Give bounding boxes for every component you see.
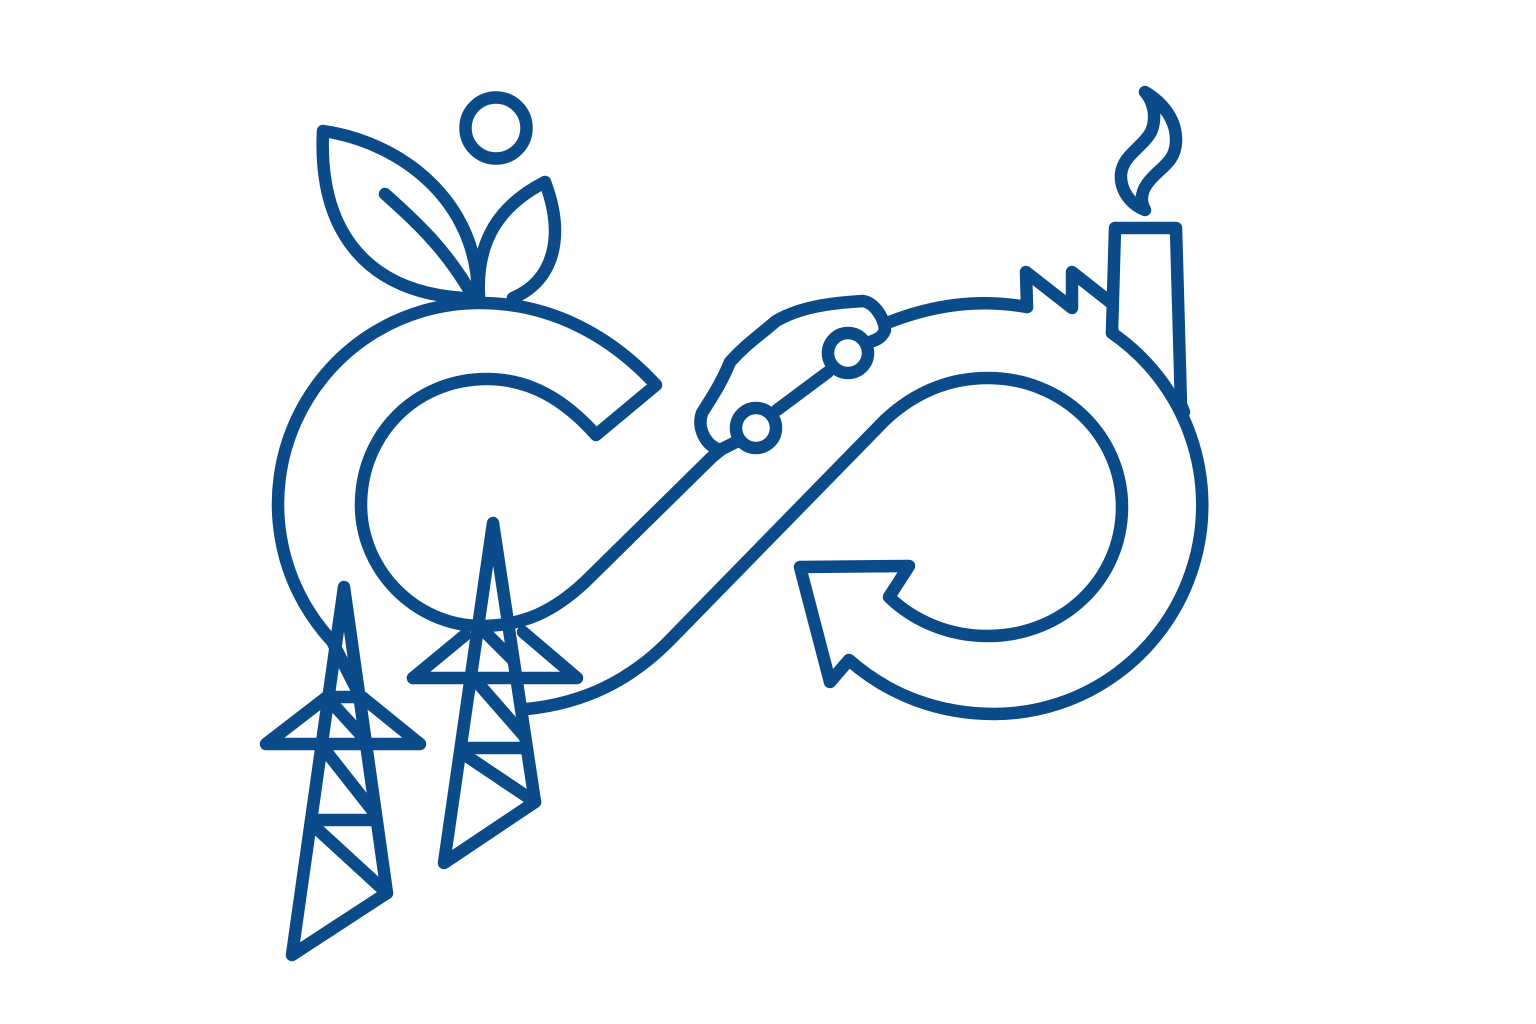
- icon: left pylon: [266, 587, 420, 955]
- large leaf: [323, 131, 478, 298]
- wheel: front: [828, 333, 868, 373]
- axle: [777, 372, 828, 410]
- icon: right pylon: [413, 523, 577, 863]
- infinity arrow: right loop and arrowhead: [527, 303, 1202, 714]
- infinity arrow: left loop: [278, 303, 738, 640]
- wheel: rear: [736, 408, 776, 448]
- icon: sun circle: [466, 98, 526, 158]
- small leaf: [479, 182, 555, 298]
- icon: factory chimney with zigzag roof: [1026, 228, 1184, 412]
- icon: plant sprout: [323, 131, 555, 298]
- zigzag roof: [1026, 272, 1110, 308]
- icon: electric car: [701, 301, 885, 450]
- icon: flame: [1121, 92, 1176, 210]
- leaf vein: [385, 194, 468, 288]
- chimney: [1112, 228, 1184, 412]
- car body: [701, 301, 885, 450]
